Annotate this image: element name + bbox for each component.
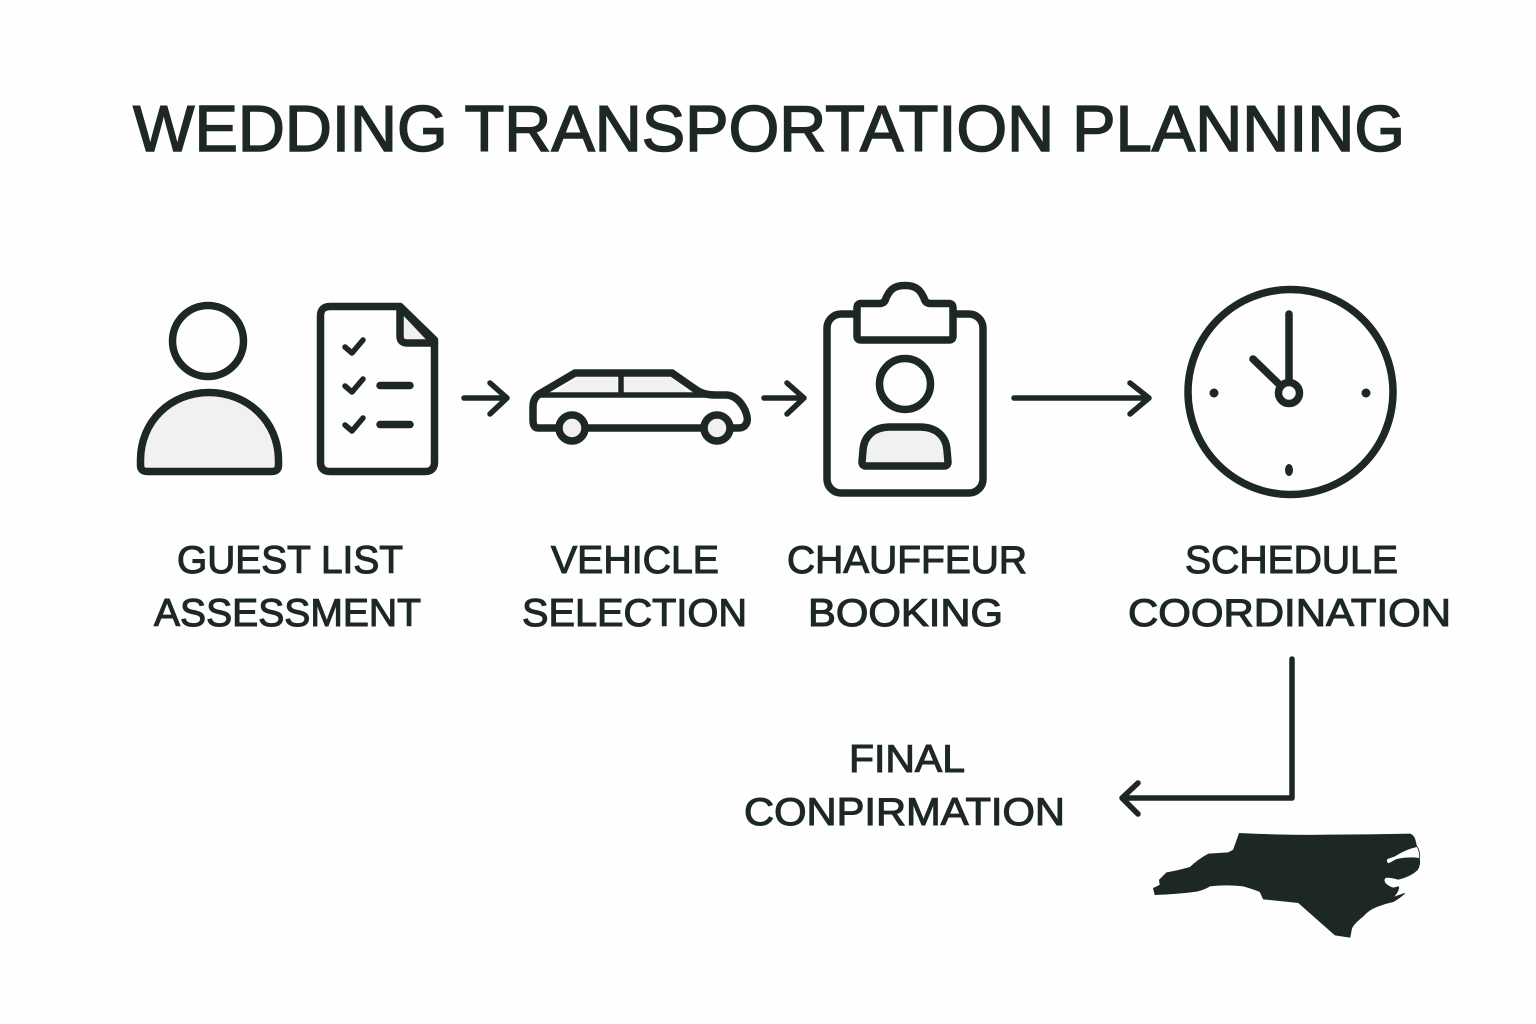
label: schedule coordination	[1128, 539, 1451, 635]
arrow: chauffeur to schedule	[1014, 383, 1149, 414]
label: guest list assessment	[154, 539, 421, 635]
label: final confirmation: CONPIRMATION	[744, 791, 1065, 834]
icon: car	[533, 373, 747, 441]
label: vehicle selection: SELECTION	[522, 592, 747, 635]
label: vehicle selection	[522, 539, 747, 635]
arrow: schedule to final confirmation	[1122, 659, 1292, 814]
label: vehicle selection: VEHICLE	[551, 539, 719, 582]
icon: clock	[1188, 290, 1393, 494]
label: schedule coordination: SCHEDULE	[1185, 539, 1398, 582]
icon: clipboard with chauffeur	[827, 286, 983, 493]
label: final confirmation: FINAL	[849, 738, 965, 781]
icon: North Carolina map	[1153, 833, 1420, 937]
title: WEDDING TRANSPORTATION PLANNING	[133, 92, 1405, 165]
label: guest list assessment: GUEST LIST	[177, 539, 403, 582]
icon: checklist document	[320, 306, 434, 472]
icon: guest person	[140, 306, 278, 472]
label: guest list assessment: ASSESSMENT	[154, 592, 421, 635]
arrow: guest list to vehicle	[464, 383, 507, 414]
label: final confirmation	[744, 738, 1065, 834]
label: chauffeur booking: BOOKING	[808, 592, 1003, 635]
label: chauffeur booking: CHAUFFEUR	[787, 539, 1027, 582]
label: chauffeur booking	[787, 539, 1027, 635]
label: schedule coordination: COORDINATION	[1128, 592, 1451, 635]
arrow: vehicle to chauffeur	[764, 383, 804, 414]
